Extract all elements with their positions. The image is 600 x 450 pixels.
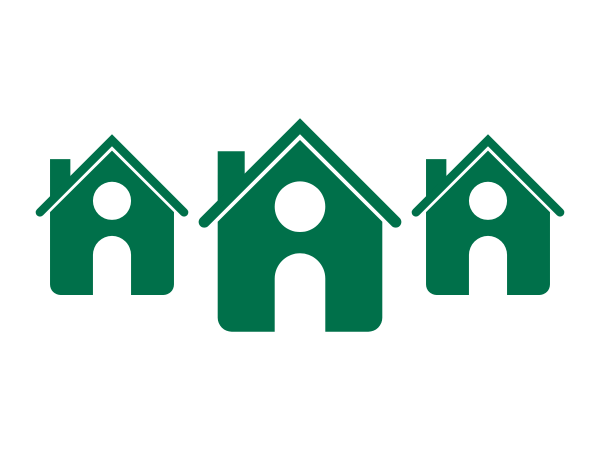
icon: left small house (40, 140, 184, 295)
icon: center large house (204, 126, 396, 332)
icon: right small house (416, 140, 560, 295)
